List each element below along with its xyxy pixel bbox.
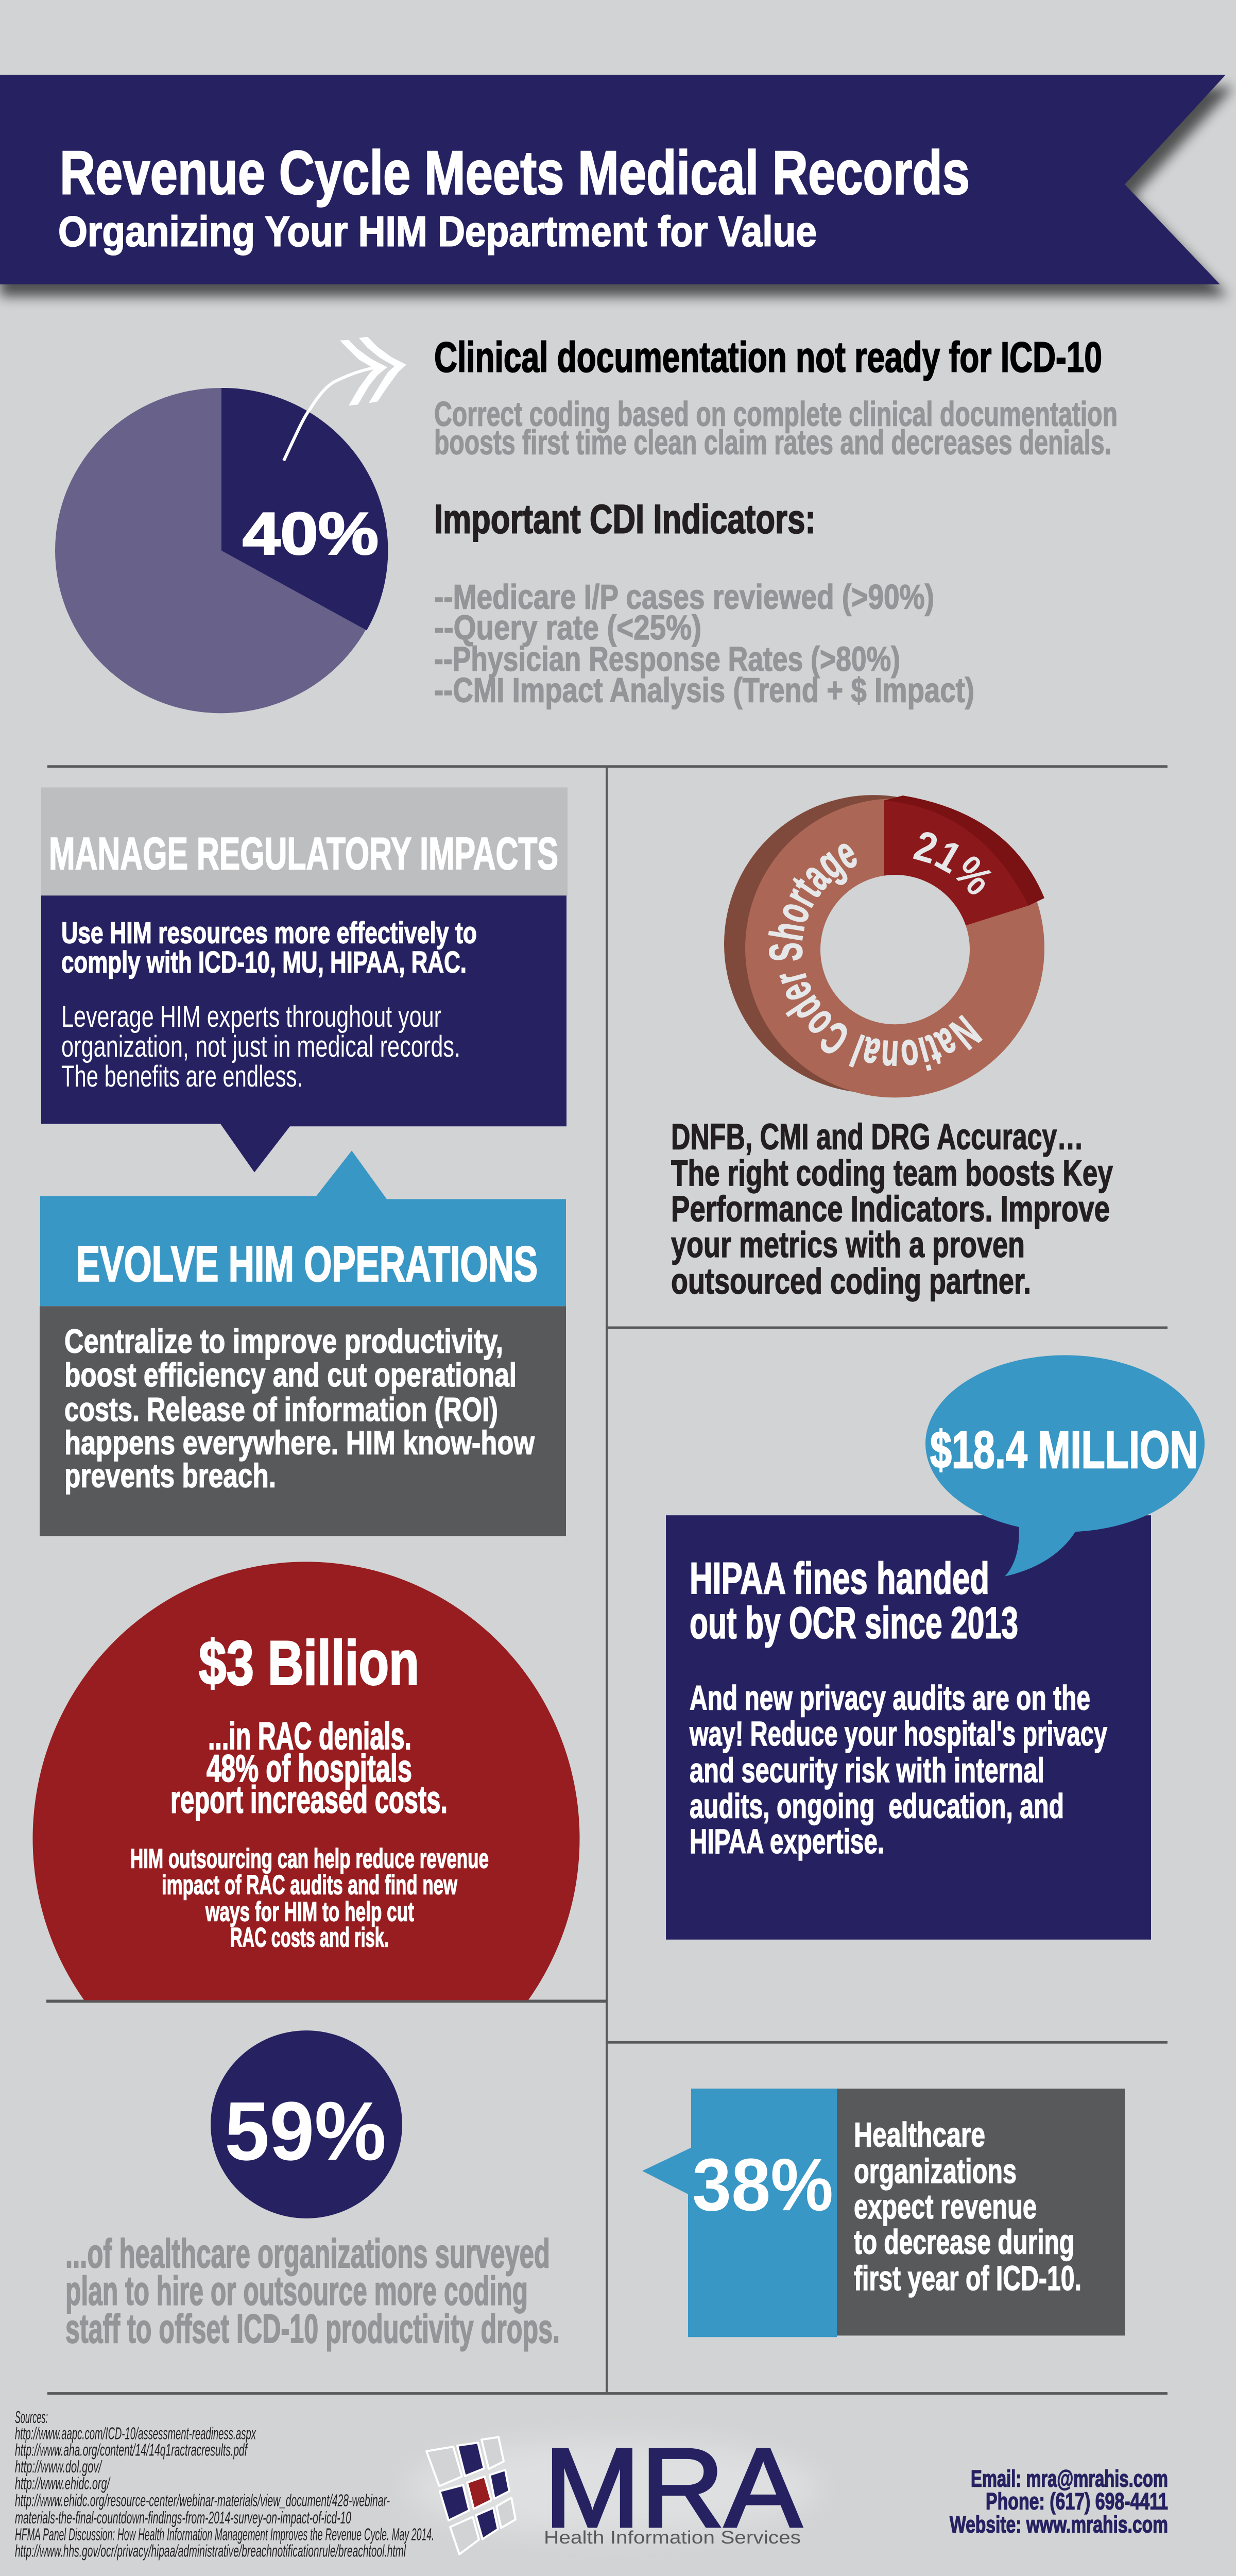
donut chart: national coder shortage 21% [724, 795, 1044, 1097]
callout box with downward pointer [41, 895, 566, 1172]
text: HIM outsourcing [130, 1844, 489, 1953]
text: centralize: boost efficiency and cut operational [64, 1357, 517, 1394]
list: CDI indicators: --Physician Response Rates (>80%) [434, 640, 900, 679]
contact details: Phone: (617) 698-4411 [986, 2488, 1168, 2514]
heading: HIPAA fines: HIPAA fines handed [690, 1554, 989, 1603]
text: RAC denials [170, 1715, 448, 1821]
text: DNFB CMI DRG accuracy: DNFB, CMI and DRG Accuracy… [671, 1116, 1084, 1157]
text: new privacy audits: audits, ongoing education, and [690, 1787, 1064, 1825]
text: RAC denials: report increased costs. [170, 1778, 448, 1821]
panel: HIPAA fines [666, 1515, 1151, 1940]
text: centralize: Centralize to improve productivity, [64, 1323, 503, 1360]
text: HIM outsourcing: ways for HIM to help cut [205, 1897, 414, 1927]
text: new privacy audits: and security risk with internal [690, 1751, 1044, 1790]
stat: 38%: 38% [692, 2143, 833, 2226]
list: CDI indicators: --CMI Impact Analysis (Trend + $ Impact) [434, 671, 974, 710]
text: HIM outsourcing: RAC costs and risk. [230, 1923, 389, 1953]
text: leverage HIM experts: organization, not just in medical records. [61, 1029, 460, 1063]
title banner [0, 75, 1233, 296]
contact details [950, 2466, 1168, 2538]
heading: manage regulatory impacts: MANAGE REGULATORY IMPACTS [49, 828, 558, 879]
dark box [40, 1306, 566, 1536]
text: healthcare organizations expect: to decrease during [854, 2223, 1074, 2261]
text: leverage HIM experts: Leverage HIM experts throughout your [61, 999, 441, 1033]
text: HIM outsourcing: impact of RAC audits and find new [162, 1870, 457, 1900]
text: healthcare organizations surveyed: staff to offset ICD-10 productivity drops. [65, 2306, 560, 2351]
text: healthcare organizations expect [854, 2116, 1082, 2298]
text: leverage HIM experts [61, 999, 460, 1093]
sources list: http://www.ehidc.org/resource-center/webinar-materials/view_document/428-webinar- [15, 2492, 390, 2511]
text: centralize: happens everywhere. HIM know-how [64, 1424, 535, 1461]
text: use HIM resources [61, 916, 477, 979]
list: CDI indicators [434, 578, 974, 710]
heading: evolve HIM operations: EVOLVE HIM OPERATIONS [76, 1236, 538, 1292]
text: DNFB CMI DRG accuracy: outsourced coding partner. [671, 1261, 1031, 1302]
panel: evolve HIM operations [40, 1150, 566, 1536]
icon: logo grid [426, 2437, 516, 2554]
text: centralize: prevents breach. [64, 1457, 276, 1494]
text: healthcare organizations surveyed: ...of healthcare organizations surveyed [65, 2231, 550, 2276]
text: use HIM resources: Use HIM resources more effectively to [61, 916, 477, 950]
text: centralize: costs. Release of information (ROI) [64, 1391, 498, 1428]
heading: HIPAA fines: out by OCR since 2013 [690, 1598, 1018, 1648]
text: new privacy audits: HIPAA expertise. [690, 1823, 884, 1861]
speech bubble: $18.4 million [925, 1355, 1205, 1577]
text: HIM outsourcing: HIM outsourcing can help reduce revenue [130, 1844, 489, 1874]
sources list [15, 2408, 434, 2561]
text block: correct coding [434, 395, 1118, 462]
sources list: http://www.aapc.com/ICD-10/assessment-readiness.aspx [15, 2425, 256, 2443]
ring label: National Coder Shortage [768, 844, 983, 1071]
pie chart: 40% [55, 388, 388, 713]
text: healthcare organizations expect: organizations [854, 2153, 1017, 2191]
panel: $3 billion red circle [33, 1562, 580, 2000]
heading: HIPAA fines [690, 1554, 1018, 1648]
sources list: HFMA Panel Discussion: How Health Information Management Improves the Revenue Cycle. May 2014. [15, 2526, 434, 2544]
stat circle: 59%: 59% [225, 2084, 386, 2178]
list: CDI indicators: --Query rate (<25%) [434, 609, 701, 647]
text: healthcare organizations expect: first year of ICD-10. [854, 2260, 1082, 2298]
pie chart: 40%: 40% [243, 500, 379, 567]
text: healthcare organizations surveyed [65, 2231, 560, 2351]
tagline: Health Information Services [544, 2528, 801, 2548]
sources list: materials-the-final-countdown-findings-from-2014-survey-on-impact-of-icd-10 [15, 2509, 351, 2528]
text: RAC denials: 48% of hospitals [207, 1747, 412, 1790]
sources list: http://www.dol.gov/ [15, 2458, 102, 2477]
sources list: Sources: [15, 2408, 48, 2427]
panel: manage regulatory impacts [41, 787, 568, 1172]
text: DNFB CMI DRG accuracy [671, 1116, 1113, 1302]
text: RAC denials: ...in RAC denials. [208, 1715, 411, 1757]
stat circle: 59% [211, 2030, 402, 2218]
text: DNFB CMI DRG accuracy: your metrics with a proven [671, 1225, 1025, 1265]
text: leverage HIM experts: The benefits are endless. [61, 1059, 303, 1093]
logo: MRA health information services [407, 2425, 819, 2554]
text: centralize [64, 1323, 535, 1494]
list: CDI indicators: --Medicare I/P cases reviewed (>90%) [434, 578, 934, 616]
text: DNFB CMI DRG accuracy: Performance Indicators. Improve [671, 1189, 1110, 1229]
text: use HIM resources: comply with ICD-10, MU, HIPAA, RAC. [61, 945, 467, 979]
text: healthcare organizations surveyed: plan to hire or outsource more coding [65, 2268, 528, 2313]
sources list: http://www.ehidc.org/ [15, 2475, 111, 2493]
ring value: 21% [913, 832, 992, 894]
sources list: http://www.hhs.gov/ocr/privacy/hipaa/administrative/breachnotificationrule/breachtool.html [15, 2542, 406, 2561]
title: Revenue Cycle Meets Medical Records [60, 139, 970, 207]
text: healthcare organizations expect: Healthcare [854, 2116, 985, 2155]
wordmark: MRA [544, 2425, 802, 2550]
icon: curved arrow with double chevron [284, 337, 406, 461]
text: healthcare organizations expect: expect revenue [854, 2188, 1037, 2226]
text: new privacy audits [689, 1679, 1107, 1861]
subtitle: Organizing Your HIM Department for Value [58, 208, 817, 255]
panel: 38% revenue decrease [642, 2089, 1125, 2337]
stat: $3 Billion: $3 Billion [199, 1629, 419, 1698]
sources list: http://www.aha.org/content/14/14q1ractracresults.pdf [15, 2441, 248, 2460]
heading: important CDI indicators: Important CDI Indicators: [434, 496, 816, 541]
